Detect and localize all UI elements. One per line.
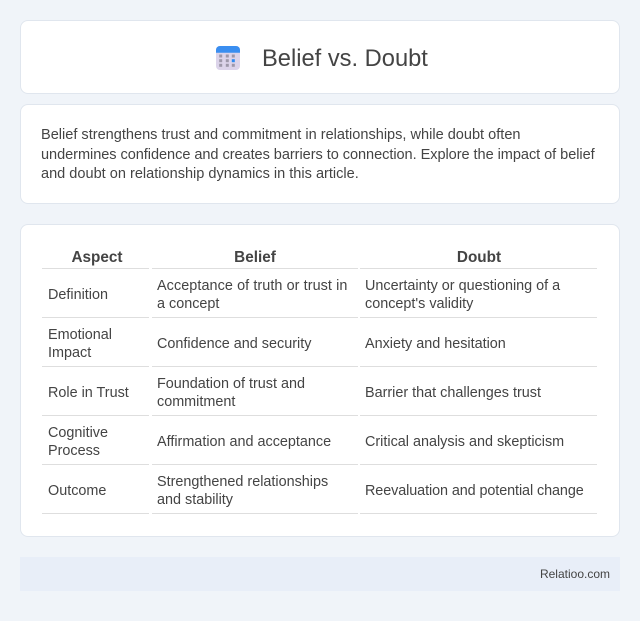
row: Outcome: and stability bbox=[157, 492, 233, 508]
panel: introduction bbox=[20, 104, 620, 204]
row: Emotional Impact: Emotional bbox=[48, 327, 112, 343]
row: Role in Trust: commitment bbox=[157, 394, 235, 410]
panel: title card bbox=[20, 20, 620, 94]
row: Role in Trust bbox=[42, 376, 597, 416]
row: Definition: concept's validity bbox=[365, 296, 473, 312]
row: Definition: Acceptance of truth or trust in bbox=[157, 278, 347, 294]
icon: calendar bbox=[216, 46, 240, 70]
row: Outcome: Outcome bbox=[48, 483, 106, 499]
row: Cognitive Process: Cognitive bbox=[48, 425, 108, 441]
row: Definition bbox=[42, 278, 597, 318]
row: Role in Trust: Barrier that challenges trust bbox=[365, 385, 541, 401]
row: Cognitive Process: Affirmation and acceptance bbox=[157, 434, 331, 450]
panel: comparison table bbox=[20, 224, 620, 537]
table header: Belief: Belief bbox=[234, 249, 276, 266]
row: Emotional Impact: Anxiety and hesitation bbox=[365, 336, 506, 352]
table bbox=[42, 249, 597, 514]
row: Emotional Impact: Impact bbox=[48, 345, 91, 361]
row: Cognitive Process bbox=[42, 425, 597, 465]
row: Emotional Impact: Confidence and security bbox=[157, 336, 311, 352]
footer text: Relatioo.com bbox=[540, 567, 610, 581]
row: Definition: a concept bbox=[157, 296, 219, 312]
intro text bbox=[41, 127, 595, 182]
row: Cognitive Process: Process bbox=[48, 443, 100, 459]
row: Definition: Uncertainty or questioning of a bbox=[365, 278, 560, 294]
row: Outcome bbox=[42, 474, 597, 514]
table header: Doubt: Doubt bbox=[457, 249, 501, 266]
table header: Aspect: Aspect bbox=[71, 249, 122, 266]
intro text: undermines confidence and creates barriers to connection. Explore the impact of belief bbox=[41, 146, 595, 162]
row: Role in Trust: Role in Trust bbox=[48, 385, 129, 401]
row: Outcome: Strengthened relationships bbox=[157, 474, 328, 490]
row: Definition: Definition bbox=[48, 287, 108, 303]
title: Belief vs. Doubt bbox=[262, 46, 428, 72]
row: Role in Trust: Foundation of trust and bbox=[157, 376, 305, 392]
intro text: and doubt on relationship dynamics in this article. bbox=[41, 166, 359, 182]
row: Emotional Impact bbox=[42, 327, 597, 367]
intro text: Belief strengthens trust and commitment in relationships, while doubt often bbox=[41, 127, 520, 143]
row: Outcome: Reevaluation and potential change bbox=[365, 483, 584, 499]
row: Cognitive Process: Critical analysis and skepticism bbox=[365, 434, 564, 450]
footer bar bbox=[20, 557, 620, 591]
